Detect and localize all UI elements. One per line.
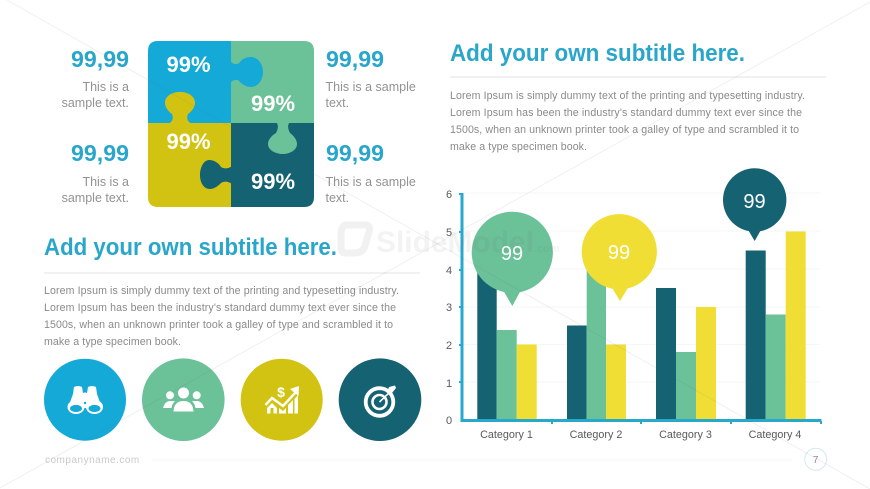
- icon: growth chart with dollar: $: [277, 384, 285, 400]
- icon: binoculars: [44, 359, 126, 441]
- puzzle: blue piece: [148, 41, 231, 123]
- stat: top left: sample text.: [62, 96, 129, 110]
- heading: right subtitle: Add your own subtitle here.: [450, 40, 745, 67]
- stat: top right: 99,99: [326, 46, 384, 72]
- y axis labels: 0: [446, 415, 452, 427]
- stat: bottom right: This is a sample: [326, 175, 416, 189]
- text block: left body: make a type specimen book.: [44, 336, 181, 348]
- puzzle: green piece: [230, 41, 314, 123]
- x axis labels: Category 4: [749, 429, 801, 441]
- puzzle label: blue: 99%: [166, 52, 210, 77]
- stat: bottom left: [62, 140, 129, 205]
- y axis labels: 1: [446, 378, 452, 390]
- watermark: SlideModel logo: SlideModel: [376, 226, 534, 259]
- bar chart: [446, 168, 822, 441]
- puzzle label: teal: 99%: [251, 169, 295, 194]
- callout: green bubble: [472, 212, 553, 306]
- callout: teal bubble: 99: [743, 191, 766, 213]
- x axis labels: [480, 429, 801, 441]
- callout: yellow bubble: 99: [608, 242, 630, 264]
- text block: right body: 1500s, when an unknown printer took a galley of type and scrambled it to: [450, 124, 799, 136]
- text block: left body: Lorem Ipsum is simply dummy text of the printing and typesetting industry.: [44, 285, 399, 297]
- icon: people: [142, 358, 225, 441]
- callout: green bubble: 99: [501, 243, 523, 265]
- panel: puzzle with four stats: [62, 41, 416, 207]
- y axis labels: 2: [446, 340, 452, 352]
- stat: top right: [326, 46, 416, 110]
- stat: top left: [62, 46, 129, 110]
- icon: growth chart with dollar: [241, 359, 323, 441]
- stat: bottom right: [326, 140, 416, 205]
- chart bars: category 2: [567, 255, 626, 420]
- x axis labels: Category 3: [659, 429, 712, 441]
- callout: teal bubble: [723, 168, 786, 241]
- chart axes: [459, 193, 822, 424]
- stat: top left: This is a: [82, 80, 129, 94]
- x axis labels: Category 1: [480, 429, 533, 441]
- stat: bottom left: 99,99: [71, 140, 129, 166]
- y axis labels: [446, 189, 452, 427]
- chart bars: category 4: [746, 232, 806, 420]
- y axis labels: 4: [446, 265, 452, 277]
- stat: bottom right: text.: [326, 191, 349, 205]
- puzzle: teal piece: [200, 122, 314, 207]
- chart bars: category 3: [656, 288, 716, 420]
- stat: bottom right: 99,99: [326, 140, 384, 166]
- puzzle label: green: 99%: [251, 91, 295, 116]
- footer: company name: companyname.com: [45, 455, 140, 466]
- puzzle label: yellow: 99%: [166, 129, 210, 154]
- text block: right body: [450, 90, 805, 153]
- chart bars: category 1: [477, 257, 537, 420]
- heading: left subtitle: Add your own subtitle here.: [44, 234, 337, 261]
- text block: left body: [44, 285, 399, 348]
- text block: left body: Lorem Ipsum has been the industry's standard dummy text ever since the: [44, 302, 396, 314]
- text block: right body: Lorem Ipsum is simply dummy text of the printing and typesetting industry.: [450, 90, 805, 102]
- page number: [805, 448, 827, 470]
- callout: yellow bubble: [582, 214, 657, 301]
- y axis labels: 5: [446, 227, 452, 239]
- page number: 7: [813, 455, 819, 466]
- puzzle: yellow piece: [148, 92, 231, 207]
- stat: bottom left: This is a: [82, 175, 129, 189]
- text block: right body: Lorem Ipsum has been the industry's standard dummy text ever since the: [450, 107, 802, 119]
- stat: bottom left: sample text.: [62, 191, 129, 205]
- stat: top left: 99,99: [71, 46, 129, 72]
- text block: right body: make a type specimen book.: [450, 141, 587, 153]
- y axis labels: 3: [446, 302, 452, 314]
- stat: top right: text.: [326, 96, 349, 110]
- x axis labels: Category 2: [570, 429, 622, 441]
- text block: left body: 1500s, when an unknown printer took a galley of type and scrambled it to: [44, 319, 393, 331]
- y axis labels: 6: [446, 189, 452, 201]
- icon: target: [339, 358, 421, 441]
- watermark: SlideModel logo: .com: [534, 243, 560, 255]
- stat: top right: This is a sample: [326, 80, 416, 94]
